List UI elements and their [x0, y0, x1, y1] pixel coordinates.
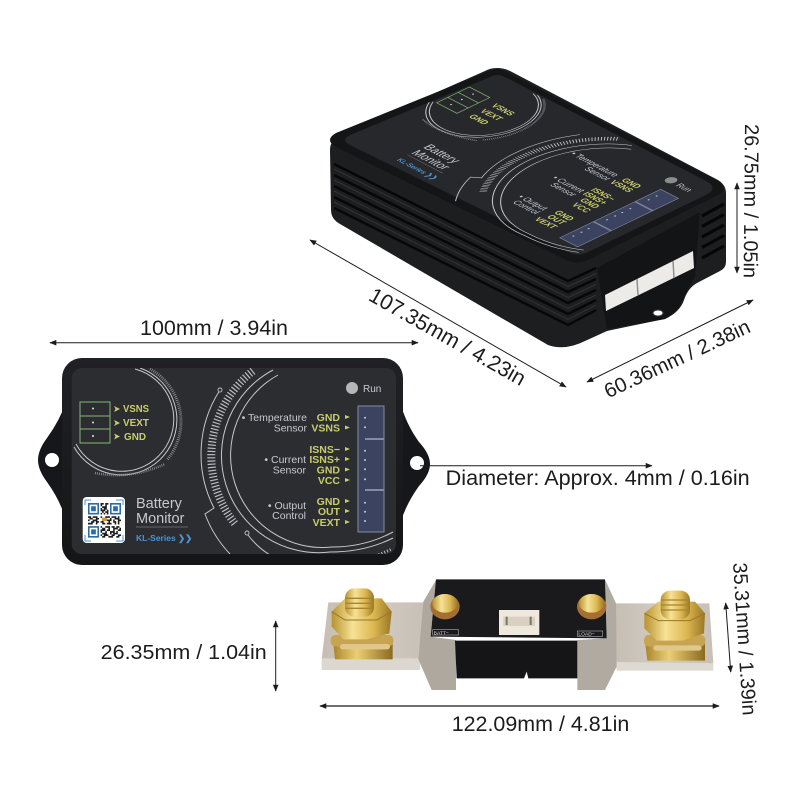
shunt JST connector [499, 610, 539, 635]
iso sensor labels: • Temperature [568, 150, 622, 178]
iso right ribs [702, 204, 724, 258]
pin labels: GND [317, 464, 340, 476]
battery monitor title: KL-Series ❯❯ [136, 533, 192, 544]
iso terminal labels: GND [466, 113, 492, 126]
battery monitor title: Battery [136, 496, 183, 512]
iso large circle arcs [455, 134, 632, 253]
iso terminal labels [466, 102, 518, 128]
pin labels: OUT [318, 506, 341, 518]
iso battery monitor title [394, 142, 471, 181]
dimension: length 122.09mm: 122.09mm / 4.81in [452, 712, 629, 736]
sensor labels: Control [272, 510, 306, 522]
terminal labels: VEXT [123, 417, 150, 429]
iso top bevel [330, 69, 724, 262]
iso pin labels: OUT [544, 213, 570, 226]
iso pin labels: VEXT [532, 216, 561, 230]
pin labels: VCC [318, 475, 340, 487]
iso top face [345, 75, 712, 254]
pin labels: GND [317, 496, 340, 508]
dimension: width 60.36mm: 60.36mm / 2.38in [601, 315, 754, 403]
iso connector block [560, 189, 678, 247]
sensor labels: • Current [264, 454, 306, 466]
iso pin labels: ISNS− [588, 187, 619, 202]
front view device: battery monitor [38, 358, 430, 565]
terminal labels: VSNS [123, 403, 149, 415]
iso mounting hole [653, 310, 663, 316]
battery monitor title: Monitor [136, 511, 185, 527]
shunt [322, 579, 713, 690]
pin labels: VSNS [311, 422, 340, 434]
iso pin labels: VSNS [607, 179, 636, 194]
iso pin labels [530, 174, 645, 230]
run indicator [346, 382, 381, 395]
iso battery monitor title: KL-Series ❯❯ [394, 157, 440, 181]
BATT and LOAD labels: LOAD− [578, 632, 595, 638]
dimension: hole diameter: Diameter: Approx. 4mm / 0.16in [446, 466, 750, 490]
iso pin labels: GND [552, 209, 577, 222]
pin labels [309, 412, 350, 529]
iso rib highlights [334, 169, 596, 320]
left brass bolt [331, 588, 393, 659]
connector block [358, 406, 384, 532]
iso sensor labels: Control [510, 199, 543, 215]
iso panel artwork: right side [455, 134, 691, 253]
sensor labels: • Temperature [242, 412, 307, 424]
run indicator: Run [363, 384, 381, 395]
pin labels: GND [317, 412, 340, 424]
shunt metal bracket left [418, 580, 456, 690]
sensor labels: Sensor [273, 464, 306, 476]
right brass bolt [644, 591, 705, 661]
iso battery monitor title: Battery [420, 142, 464, 165]
circuit artwork [74, 368, 393, 556]
dimension: width 100mm: 100mm / 3.94in [140, 316, 288, 340]
sensor labels: • Output [268, 500, 306, 512]
shunt left plate [322, 602, 424, 670]
iso white connectors [605, 251, 694, 311]
dimension: length 107.35mm: 107.35mm / 4.23in [365, 283, 530, 391]
dimension: height 26.35mm: 26.35mm / 1.04in [101, 642, 267, 664]
front panel [72, 368, 396, 554]
sensor labels: Sensor [274, 422, 307, 434]
shunt circuit board [431, 579, 607, 638]
pin labels: ISNS+ [309, 454, 340, 466]
iso sensor labels: • Current [550, 175, 588, 194]
terminal labels: GND [124, 431, 146, 443]
shunt small screws [430, 594, 606, 619]
dimension: height 26.75mm: 26.75mm / 1.05in [739, 124, 762, 278]
iso pin labels: GND [619, 177, 644, 190]
iso left side grooves [334, 164, 596, 325]
iso terminal labels: VEXT [477, 108, 506, 122]
iso panel artwork: left side [396, 86, 546, 180]
iso green terminal [437, 87, 490, 113]
iso run indicator [662, 176, 696, 193]
iso pin labels: ISNS+ [580, 190, 611, 206]
shunt lower black block [455, 641, 577, 678]
QR code [83, 497, 125, 543]
iso small circle arcs [422, 94, 546, 142]
pin labels: VEXT [313, 517, 341, 529]
battery monitor title [136, 496, 192, 544]
iso right recessed face [597, 212, 700, 329]
BATT and LOAD labels: BATT− [434, 630, 449, 636]
iso pin labels: GND [577, 197, 603, 210]
isometric device: battery monitor [330, 68, 726, 347]
pin labels: ISNS− [309, 444, 340, 456]
dimension: length 107.35mm [310, 240, 566, 391]
iso device body [330, 68, 726, 347]
shunt metal bracket right [577, 579, 617, 690]
left and right mounting ears [38, 402, 430, 524]
iso sensor labels: Sensor [582, 166, 614, 182]
front body [62, 358, 403, 565]
iso battery monitor title: Monitor [408, 148, 454, 172]
iso run indicator: Run [673, 182, 695, 193]
iso sensor labels: Sensor [547, 181, 580, 198]
terminal labels [114, 403, 150, 443]
shunt right plate [615, 603, 713, 671]
sensor labels [242, 412, 307, 522]
iso pin labels: VCC [569, 201, 594, 214]
dimension: height 35.31mm: 35.31mm / 1.39in [728, 562, 760, 716]
iso terminal labels: VSNS [489, 102, 518, 117]
iso sensor labels: • Output [515, 194, 551, 212]
green terminal block [80, 402, 110, 443]
BATT and LOAD labels [433, 630, 603, 638]
mounting holes [45, 453, 424, 470]
iso sensor labels [490, 150, 622, 216]
